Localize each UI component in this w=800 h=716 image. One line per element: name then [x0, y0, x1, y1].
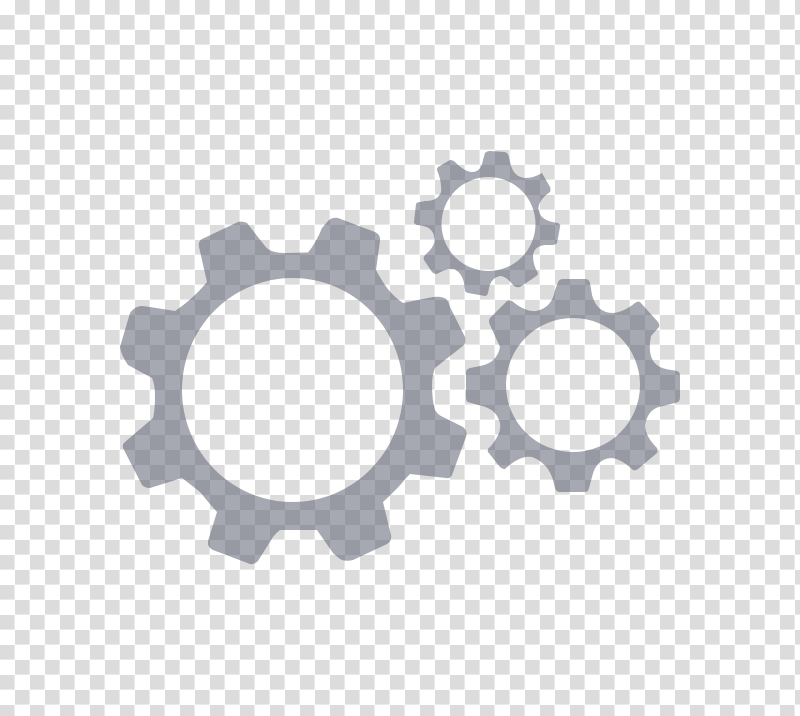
icon: medium right gear [466, 279, 680, 492]
icon: large gear [120, 218, 467, 564]
icon: small top gear [414, 151, 560, 296]
